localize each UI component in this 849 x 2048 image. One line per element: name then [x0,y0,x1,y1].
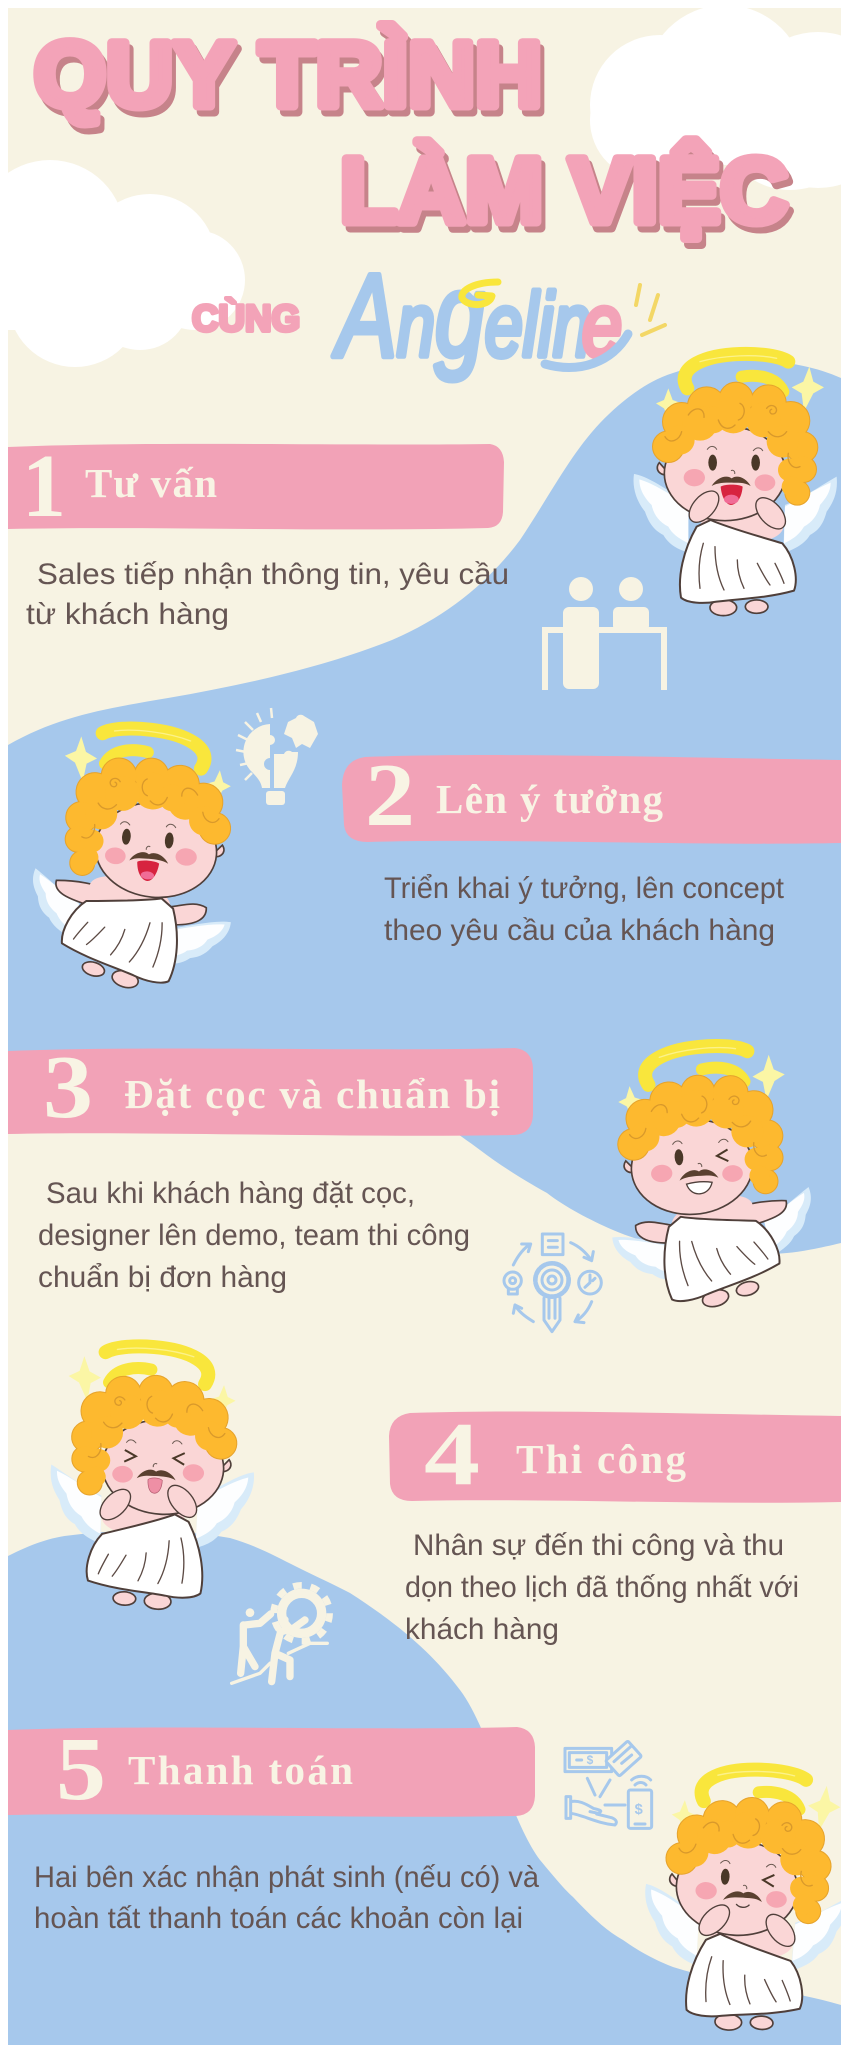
title: QUY TRÌNH [38,29,546,132]
step 4 text: dọn theo lịch đã thống nhất với [405,1571,799,1604]
number 4: 4 [424,1405,480,1504]
angel 4 [44,1342,261,1614]
angel 1 [634,354,837,616]
step 4 text: khách hàng [405,1613,559,1646]
step 3 text: Sau khi khách hàng đặt cọc, [46,1177,415,1210]
step 5 header [8,1720,535,1819]
number 1: 1 [22,437,66,536]
angel 2 [33,722,232,988]
number 3: 3 [43,1038,93,1137]
step 3 text [38,1177,470,1294]
step 5 text: hoàn tất thanh toán các khoản còn lại [34,1902,523,1935]
step 1 text: Sales tiếp nhận thông tin, yêu cầu [37,558,509,591]
number 2: 2 [365,746,415,845]
icon: payment: $ [587,1753,594,1767]
step 4 text: Nhân sự đến thi công và thu [413,1529,784,1562]
step 3 text: designer lên demo, team thi công [38,1219,470,1252]
step 5 text [34,1861,539,1935]
step 1 header [8,444,504,530]
cloud: top right [590,5,849,190]
title: QUY TRÌNH [34,23,542,126]
icon: meeting desk [542,577,667,690]
angel 5 [638,1764,849,2036]
icon: payment: $ [635,1802,643,1818]
step 3 header [8,1048,533,1136]
icon: teamwork gear [232,1585,330,1683]
cloud: left [0,160,245,367]
logo: Angeline [330,272,668,384]
logo: Angeline: e [582,275,622,376]
step 4 header [389,1405,841,1504]
logo: Angeline: Angelin [332,250,591,382]
heading: Tư vấn: Tư vấn [85,460,217,506]
step 2 text: theo yêu cầu của khách hàng [384,914,775,947]
step 1 text: từ khách hàng [26,598,229,631]
heading: Thanh toán: Thanh toán [128,1747,353,1793]
step 2 text: Triển khai ý tưởng, lên concept [384,872,785,905]
angel 3 [612,1039,811,1308]
title: LÀM VIỆC [344,145,792,248]
step 3 text: chuẩn bị đơn hàng [38,1261,287,1294]
step 2 header [342,755,841,844]
title: LÀM VIỆC [340,139,788,242]
icon: payment [565,1741,652,1828]
step 4 text [405,1529,799,1646]
step 5 text: Hai bên xác nhận phát sinh (nếu có) và [34,1861,539,1894]
number 5: 5 [56,1720,106,1819]
blue wave: upper band [8,360,841,1255]
heading: Đặt cọc và chuẩn bị: Đặt cọc và chuẩn bị [124,1071,500,1117]
step 1 text [26,558,509,631]
heading: Thi công: Thi công [516,1436,686,1482]
heading: Lên ý tưởng: Lên ý tưởng [436,776,664,822]
step 2 text [384,872,785,947]
blue wave: lower band [8,1531,841,2045]
icon: process gear and pencil [504,1234,601,1332]
icon: puzzle bulb [236,708,318,805]
subtitle: cùng: CÙNG [192,297,300,339]
title [34,23,792,248]
